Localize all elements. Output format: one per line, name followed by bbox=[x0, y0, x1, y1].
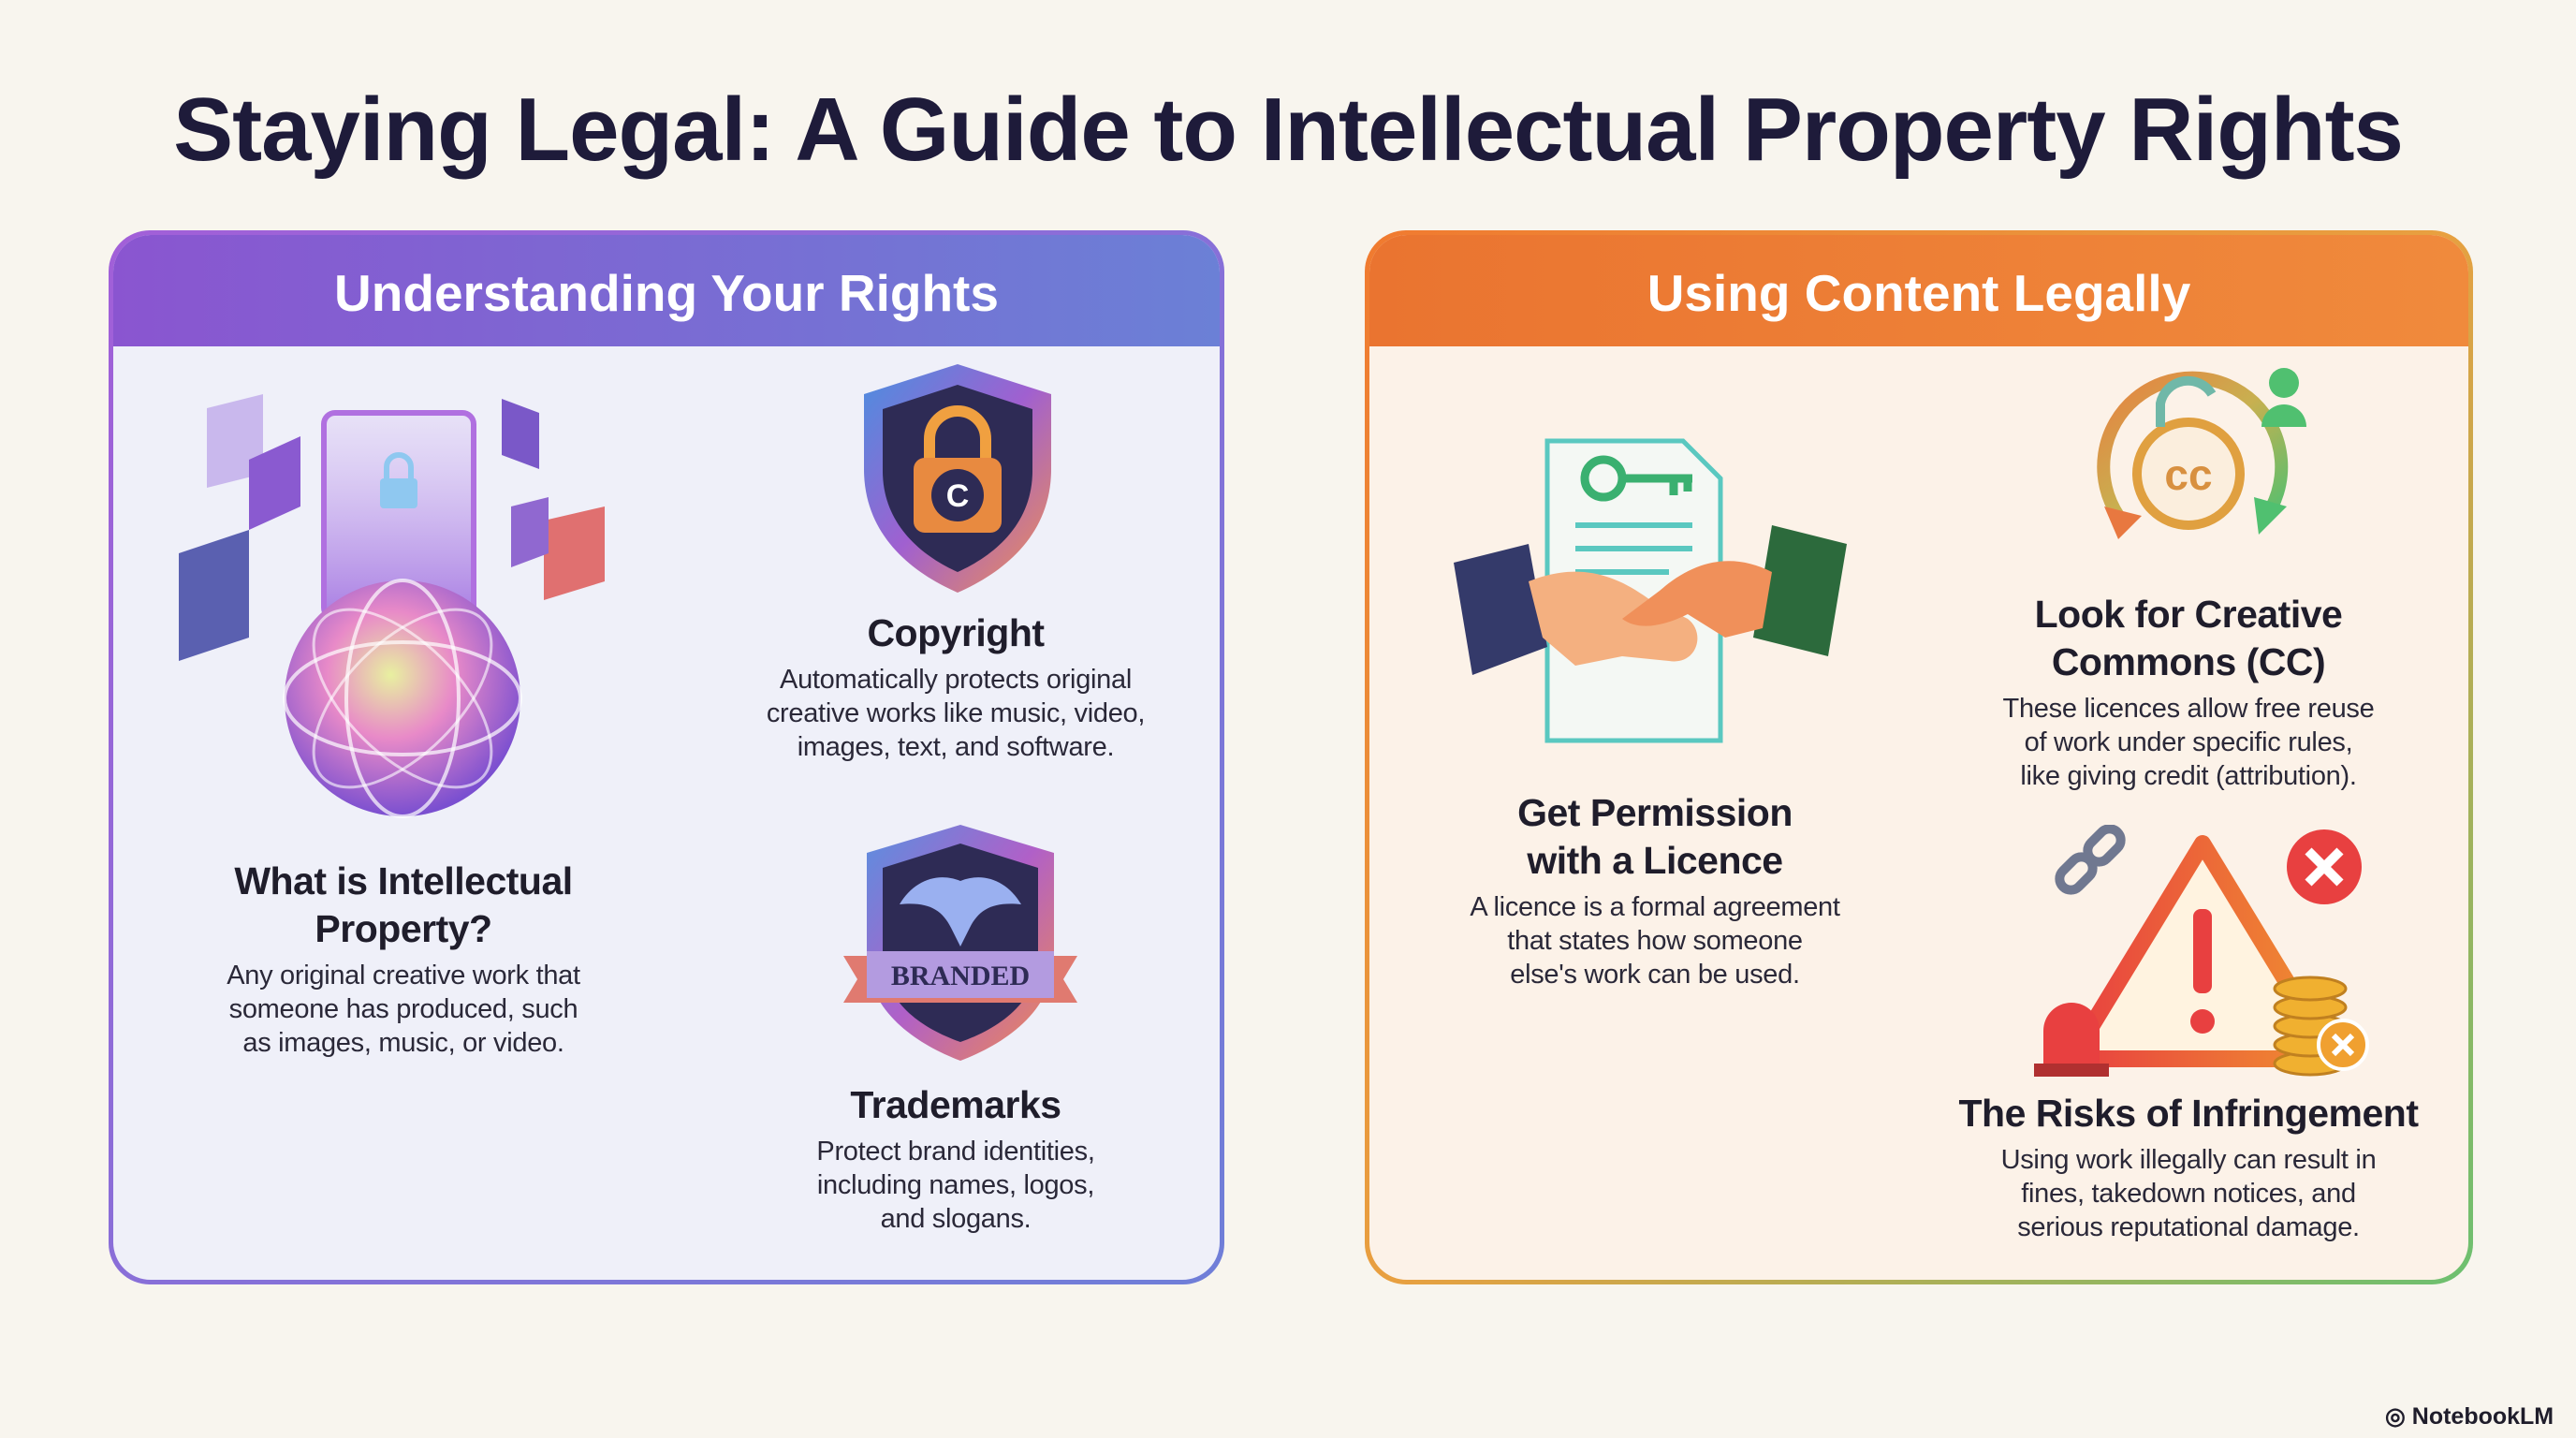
text: creative commons: These licences allow free reuse bbox=[2003, 694, 2374, 724]
text: trademarks: Trademarks bbox=[850, 1083, 1061, 1126]
text: risks of infringement bbox=[1958, 1092, 2419, 1242]
text: trademarks: Protect brand identities, bbox=[816, 1137, 1095, 1167]
text: copyright: Copyright bbox=[867, 611, 1045, 654]
text: what is intellectual property: Any original creative work that bbox=[227, 961, 580, 990]
text: creative commons: like giving credit (attribution). bbox=[2020, 761, 2357, 791]
icon: trademark badge: BRANDED bbox=[891, 961, 1030, 991]
heading: using content legally bbox=[1369, 235, 2468, 346]
text: get permission: that states how someone bbox=[1507, 926, 1803, 956]
text: trademarks bbox=[816, 1083, 1095, 1234]
text: trademarks: including names, logos, bbox=[817, 1170, 1094, 1200]
text: what is intellectual property: Property? bbox=[315, 907, 492, 950]
text: trademarks: and slogans. bbox=[881, 1204, 1031, 1234]
icon: copyright shield bbox=[864, 364, 1051, 593]
text: creative commons bbox=[2003, 593, 2374, 791]
text: get permission bbox=[1470, 791, 1840, 990]
heading: using content legally: Using Content Legally bbox=[1647, 264, 2190, 322]
icon: IP globe bbox=[179, 394, 605, 818]
text: risks of infringement: The Risks of Infringement bbox=[1959, 1092, 2418, 1135]
text: risks of infringement: serious reputational damage. bbox=[2017, 1212, 2360, 1242]
text: what is intellectual property: What is Intellectual bbox=[234, 859, 573, 902]
panel: understanding your rights bbox=[109, 230, 1224, 1284]
text: creative commons: Commons (CC) bbox=[2052, 640, 2325, 683]
text: risks of infringement: Using work illegally can result in bbox=[2001, 1145, 2376, 1175]
text: get permission: with a Licence bbox=[1527, 839, 1783, 882]
icon: creative commons: cc bbox=[2164, 450, 2213, 499]
footer: NotebookLM logo: ◎ NotebookLM bbox=[2385, 1403, 2554, 1430]
heading: understanding your rights: Understanding Your Rights bbox=[334, 264, 999, 322]
icon: creative commons bbox=[2097, 368, 2306, 539]
icon: infringement warning bbox=[2034, 825, 2369, 1077]
panel: using content legally bbox=[1365, 230, 2473, 1284]
text: get permission: Get Permission bbox=[1517, 791, 1793, 834]
heading: understanding your rights bbox=[113, 235, 1220, 346]
icon: handshake and licence bbox=[1454, 438, 1847, 743]
text: get permission: A licence is a formal agreement bbox=[1470, 892, 1840, 922]
text: what is intellectual property: as images, music, or video. bbox=[242, 1028, 564, 1058]
icon: copyright shield: C bbox=[946, 478, 969, 514]
text: creative commons: Look for Creative bbox=[2035, 593, 2342, 636]
text: what is intellectual property bbox=[227, 859, 580, 1058]
text: what is intellectual property: someone has produced, such bbox=[229, 994, 578, 1024]
icon: trademark badge bbox=[843, 825, 1077, 1061]
text: get permission: else's work can be used. bbox=[1510, 960, 1800, 990]
text: copyright: Automatically protects original bbox=[780, 665, 1132, 695]
text: copyright: creative works like music, video, bbox=[767, 698, 1145, 728]
text: copyright bbox=[767, 611, 1145, 762]
text: risks of infringement: fines, takedown notices, and bbox=[2021, 1179, 2356, 1209]
title: Staying Legal: A Guide to Intellectual Property Rights bbox=[173, 80, 2403, 180]
text: creative commons: of work under specific rules, bbox=[2025, 727, 2352, 757]
text: copyright: images, text, and software. bbox=[798, 732, 1114, 762]
